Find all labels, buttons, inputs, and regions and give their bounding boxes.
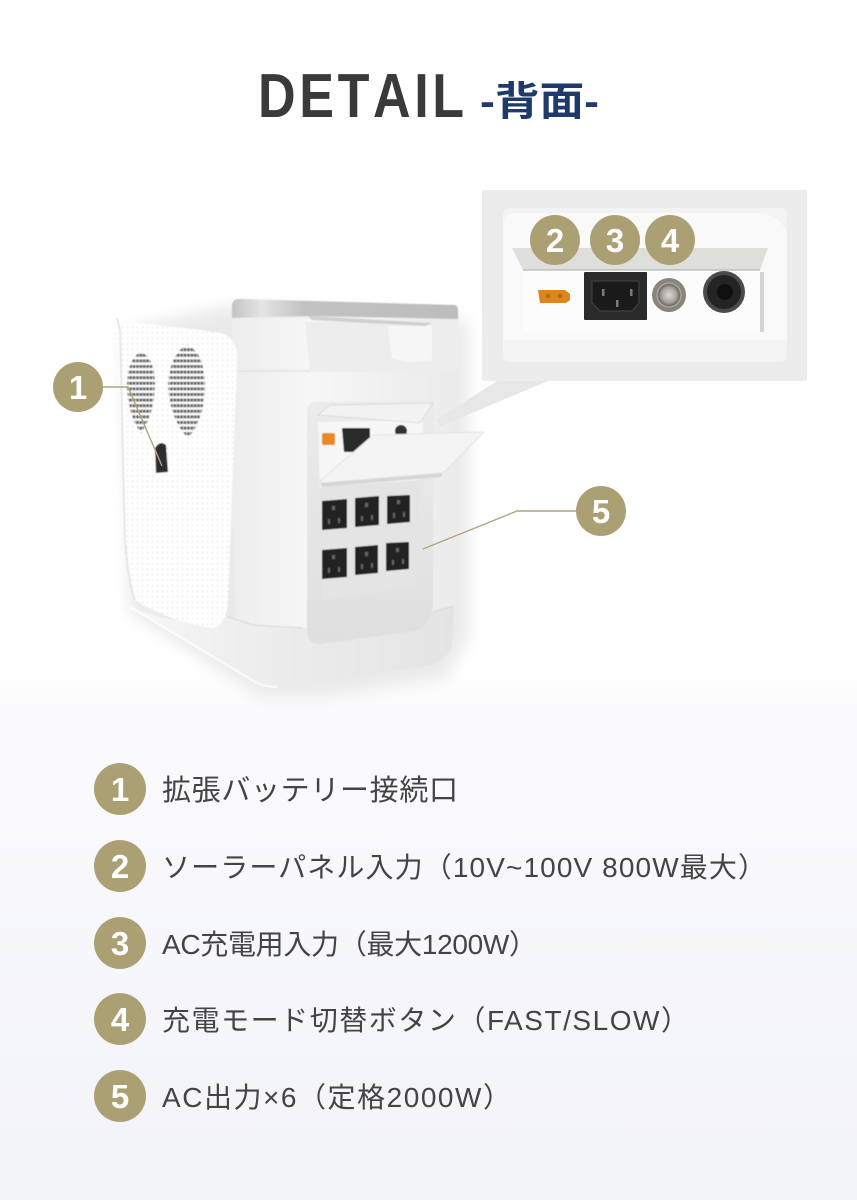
speaker vent left [127, 352, 155, 433]
IEC AC inlet [584, 272, 647, 320]
callout 3: 3 [606, 222, 624, 259]
callout 1: 1 [69, 369, 87, 406]
callout 4 [645, 215, 695, 265]
inset: close-up of input ports [482, 190, 807, 381]
legend item 4: 充電モード切替ボタン（FAST/SLOW） [162, 1005, 689, 1036]
callout 2: 2 [546, 222, 564, 259]
power button [703, 271, 745, 313]
callout 5: 5 [592, 493, 610, 530]
callout 5 [576, 486, 626, 536]
callout 1 [53, 362, 103, 412]
legend item 3: AC充電用入力（最大1200W） [162, 929, 537, 960]
open flap [320, 432, 484, 483]
port recess [307, 402, 433, 644]
socket panel [320, 480, 420, 600]
legend list [94, 763, 766, 1122]
title [258, 62, 599, 131]
legend item 2: ソーラーパネル入力（10V~100V 800W最大） [162, 852, 766, 883]
legend item 5 [94, 1070, 511, 1122]
callout 3 [590, 215, 640, 265]
legend item 4: 4 [111, 1001, 130, 1038]
base band [130, 606, 454, 687]
legend item 2 [94, 840, 766, 892]
unit body [232, 318, 458, 628]
speaker vent right [168, 345, 205, 438]
legend item 3: 3 [111, 925, 129, 962]
legend item 1 [94, 763, 458, 815]
title: -背面- [480, 80, 599, 124]
back panel with perforation [117, 318, 237, 628]
legend item 5: AC出力×6（定格2000W） [162, 1082, 511, 1113]
legend item 1: 1 [111, 771, 129, 808]
legend item 2: 2 [111, 848, 129, 885]
legend item 5: 5 [111, 1078, 129, 1115]
XT60 solar input [538, 290, 570, 303]
legend item 3 [94, 917, 537, 969]
expansion battery port [155, 443, 168, 473]
upper lid [318, 403, 433, 423]
inset lid [512, 248, 768, 270]
product: power station rear view [117, 299, 484, 697]
legend item 4 [94, 993, 689, 1045]
top handle lid [232, 299, 458, 319]
charge mode switch [652, 278, 686, 312]
callout 4: 4 [661, 222, 680, 259]
leader lines [100, 387, 578, 549]
AC sockets [322, 495, 410, 579]
upper port area [318, 420, 423, 488]
inset pointer wedge [436, 381, 548, 426]
legend item 1: 拡張バッテリー接続口 [162, 774, 458, 807]
callout 2 [530, 215, 580, 265]
title: DETAIL [258, 62, 468, 131]
